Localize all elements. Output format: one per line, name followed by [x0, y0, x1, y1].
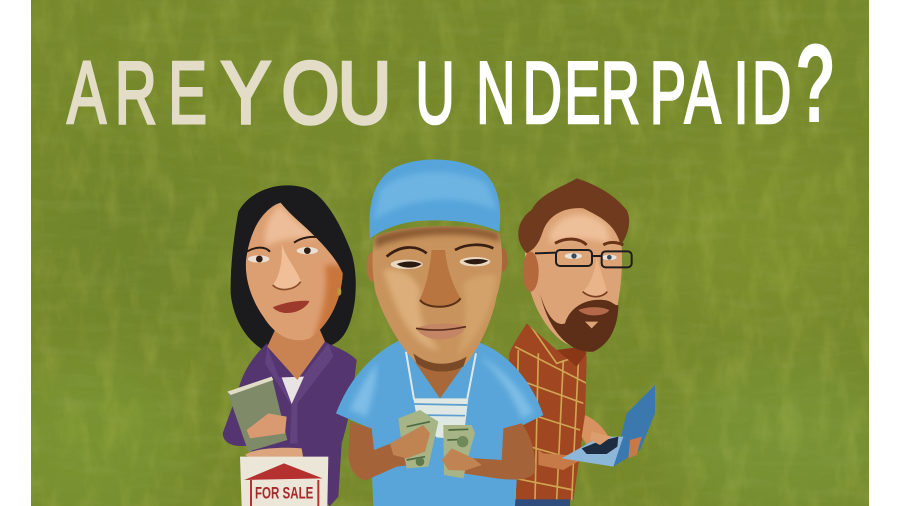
money left — [398, 410, 438, 468]
arm and hand — [582, 415, 612, 455]
ears — [367, 252, 378, 282]
scrubs highlight — [480, 357, 533, 418]
hand on book — [247, 413, 287, 438]
ear — [523, 252, 539, 292]
hair back — [231, 185, 356, 350]
hair — [518, 178, 629, 253]
mouth — [578, 307, 609, 315]
hand on sign — [245, 448, 303, 460]
hand left — [390, 425, 430, 458]
eyebrows — [247, 237, 319, 252]
neck — [407, 350, 473, 398]
title — [67, 20, 836, 146]
eyes — [248, 247, 318, 263]
eyebrows — [555, 239, 623, 245]
figure: surgeon with money — [336, 160, 543, 506]
face — [372, 226, 502, 372]
right arm — [450, 423, 535, 480]
laptop — [562, 385, 655, 467]
lips — [273, 301, 309, 313]
eyes — [565, 253, 617, 260]
earring — [337, 288, 341, 296]
hair front — [281, 199, 344, 273]
face — [246, 203, 343, 340]
eyes — [391, 257, 490, 269]
beard — [540, 293, 618, 352]
nose — [419, 250, 461, 307]
nose — [273, 243, 301, 290]
book — [227, 377, 287, 452]
neck — [267, 330, 325, 380]
for sale sign — [240, 457, 328, 506]
mask — [406, 352, 476, 440]
face shading — [265, 205, 347, 340]
figure: woman with book — [223, 185, 357, 506]
white top — [282, 377, 304, 404]
title question mark: ? — [795, 20, 836, 146]
nose — [583, 257, 607, 296]
hand on keyboard — [590, 432, 612, 445]
lips — [416, 324, 466, 339]
scrubs — [336, 340, 543, 506]
plaid shirt — [505, 323, 587, 500]
money right — [443, 425, 475, 478]
hand right — [442, 448, 482, 471]
head — [525, 200, 622, 348]
figures — [223, 160, 655, 506]
glasses — [535, 250, 632, 267]
left arm — [348, 422, 423, 480]
for sale label: FOR SALE — [255, 483, 313, 502]
figure: man with laptop — [505, 178, 655, 506]
title word: underpaid: UNDERPAID — [415, 44, 791, 142]
cap — [370, 160, 500, 238]
title word: you: YOU — [221, 44, 391, 142]
jacket — [223, 342, 357, 506]
title word: are: ARE — [67, 44, 207, 142]
forehead highlight — [550, 215, 610, 243]
jeans — [508, 499, 570, 506]
lapel highlights — [265, 343, 333, 443]
eyebrows — [387, 245, 493, 257]
